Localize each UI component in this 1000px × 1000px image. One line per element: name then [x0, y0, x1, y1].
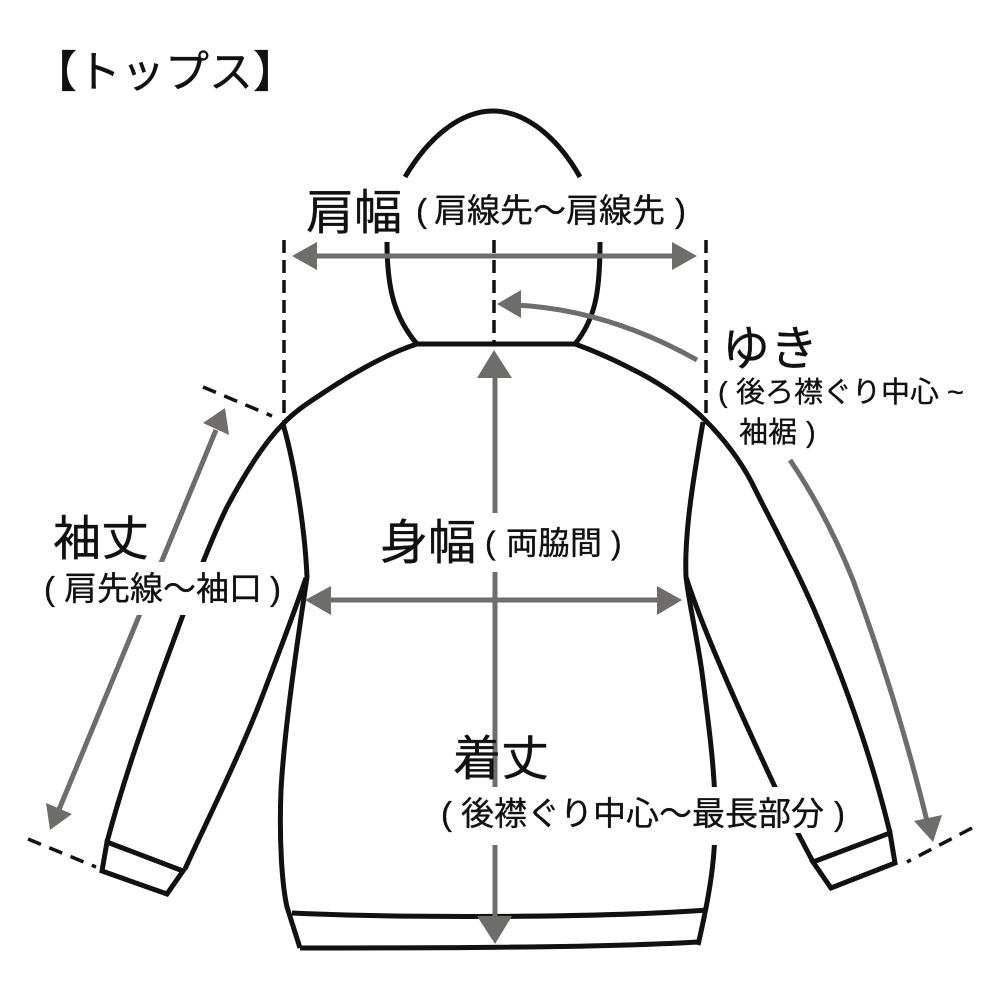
- measurement guides: dashed lines: [28, 240, 972, 867]
- label: shoulder width: ): [675, 192, 686, 229]
- label: yuki: 袖裾: [739, 416, 797, 449]
- hem top: [292, 910, 707, 916]
- label: sleeve length: ): [270, 570, 281, 607]
- arrow: yuki upper: [497, 290, 697, 360]
- label: body width: (: [485, 525, 496, 561]
- right cuff: [813, 833, 895, 888]
- arrow: shoulder width: [292, 242, 697, 270]
- label: body length: [441, 733, 845, 832]
- label: yuki: [718, 323, 964, 449]
- label: sleeve length: (: [44, 570, 55, 607]
- right body side: [686, 422, 715, 945]
- left cuff: [102, 842, 183, 894]
- arrow: body length: [477, 350, 512, 944]
- arrow: sleeve length: [46, 408, 229, 830]
- label: sleeve length: 袖丈: [53, 513, 149, 566]
- right sleeve inner: [686, 577, 812, 860]
- label: body length: (: [441, 795, 452, 832]
- label: sleeve length: [44, 513, 281, 607]
- arrow: body width: [305, 586, 682, 615]
- hood lower right: [575, 242, 600, 344]
- left sleeve inner: [185, 578, 306, 869]
- label: body width: 身幅: [380, 517, 476, 570]
- label: sleeve length: 肩先線～袖口: [64, 570, 262, 607]
- label: body length: 後襟ぐり中心～最長部分: [461, 795, 824, 832]
- arrow: yuki lower: [790, 460, 942, 842]
- left body side: [280, 424, 307, 948]
- hood top: [405, 111, 580, 177]
- label: body width: ): [611, 525, 622, 561]
- label: yuki: ~: [947, 377, 964, 409]
- right shoulder and sleeve outer: [575, 344, 890, 833]
- label: yuki: ゆき: [722, 323, 818, 376]
- label: body length: 着丈: [453, 733, 549, 786]
- label: shoulder width: (: [416, 192, 427, 229]
- left shoulder and sleeve outer: [107, 344, 417, 842]
- label: body width: [380, 517, 622, 570]
- label: yuki: ): [806, 417, 816, 449]
- label: yuki: (: [718, 377, 728, 409]
- label backgrounds: [40, 513, 845, 845]
- label: shoulder width: 肩幅: [306, 187, 402, 240]
- title: 【トップス】: [33, 48, 297, 97]
- label: yuki: 後ろ襟ぐり中心: [736, 376, 939, 409]
- garment outline: hooded top: [102, 111, 895, 948]
- hem bottom: [300, 942, 698, 948]
- label: shoulder width: 肩線先～肩線先: [434, 192, 665, 229]
- label: shoulder width: [306, 187, 686, 240]
- label: body length: ): [834, 795, 845, 832]
- hood lower left: [387, 242, 417, 344]
- collar line: [417, 342, 575, 346]
- label: body width: 両脇間: [506, 525, 602, 561]
